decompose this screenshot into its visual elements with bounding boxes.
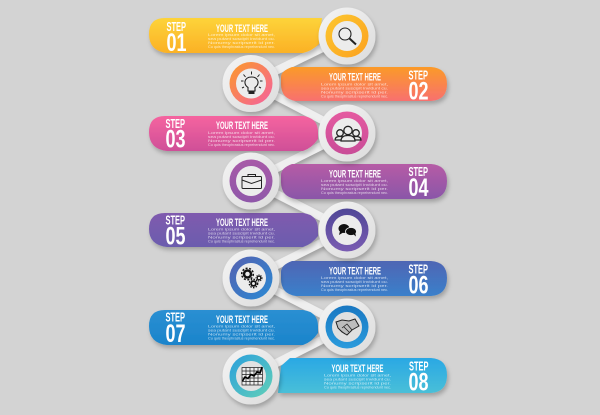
panel: step 06: sea putant suscipit invidunt cu. (321, 279, 388, 284)
panel: step 03: sea putant suscipit invidunt cu. (208, 134, 275, 139)
connector line (251, 36, 347, 376)
panel: step 07: 07 (166, 320, 186, 348)
panel: step 06: STEP (408, 262, 428, 276)
panel: step 02 (281, 67, 447, 106)
panel: step 04: Lorem ipsum dolor sit amet, (321, 178, 388, 183)
panel: step 05: YOUR TEXT HERE (216, 217, 268, 229)
panel: step 08: 08 (408, 368, 429, 396)
panel: step 02: Lorem ipsum dolor sit amet, (321, 82, 388, 86)
panel: step 07: Nonumy scripserit id per. (208, 332, 275, 336)
icon: people (318, 104, 376, 162)
panel: step 07: Lorem ipsum dolor sit amet, (208, 324, 275, 328)
panel: step 05: STEP (166, 214, 185, 228)
panel: step 04: Nonumy scripserit id per. (321, 186, 388, 191)
panel: step 03: Cu quis theophrastus reprehendunt nec. (208, 142, 275, 147)
panel: step 05: sea putant suscipit invidunt cu. (208, 230, 275, 236)
panel: step 02: 02 (408, 78, 428, 106)
panel: step 05: Lorem ipsum dolor sit amet, (208, 226, 275, 232)
panel: step 04: YOUR TEXT HERE (329, 168, 381, 180)
panel: step 07: STEP (166, 310, 185, 324)
panel: step 03: YOUR TEXT HERE (216, 120, 268, 132)
panel: step 02: Nonumy scripserit id per. (321, 90, 388, 94)
panel: step 07: YOUR TEXT HERE (216, 314, 268, 326)
panel: step 06: 06 (408, 272, 428, 300)
panel: step 01: Cu quis theophrastus reprehendunt nec. (208, 44, 275, 49)
panel: step 05: Nonumy scripserit id per. (208, 234, 275, 240)
panel: step 06 (281, 261, 447, 300)
panel: step 01: Nonumy scripserit id per. (208, 40, 275, 45)
panel: step 08: Cu quis theophrastus reprehendunt nec. (324, 384, 391, 390)
icon: line chart (222, 348, 280, 404)
icon: handshake (318, 298, 376, 356)
panel: step 06: Lorem ipsum dolor sit amet, (321, 275, 388, 280)
panel: step 07: sea putant suscipit invidunt cu. (208, 328, 275, 332)
panel: step 01: STEP (166, 20, 186, 34)
panel: step 06: YOUR TEXT HERE (329, 266, 381, 278)
panel: step 07 (149, 310, 318, 348)
panel: step 04: 04 (408, 174, 429, 202)
panel: step 03: Lorem ipsum dolor sit amet, (208, 130, 275, 135)
icon: magnifier (318, 8, 376, 64)
panel: step 05: Cu quis theophrastus reprehendunt nec. (208, 238, 275, 244)
panel: step 06: Nonumy scripserit id per. (321, 283, 388, 288)
panel: step 05: 05 (166, 222, 186, 250)
panel: step 03: 03 (166, 126, 186, 154)
panel: step 02: Cu quis theophrastus reprehendunt nec. (321, 94, 388, 98)
panel: step 04: STEP (408, 165, 428, 179)
panel: step 01: 01 (166, 29, 187, 57)
panel: step 03: STEP (166, 117, 185, 131)
icon: briefcase (222, 152, 280, 210)
panel: step 08: Lorem ipsum dolor sit amet, (324, 372, 391, 378)
panel: step 02: YOUR TEXT HERE (329, 72, 381, 84)
panel: step 01: sea putant suscipit invidunt cu. (208, 36, 275, 41)
panel: step 05 (149, 213, 318, 250)
panel: step 08: sea putant suscipit invidunt cu. (324, 376, 391, 382)
panel: step 04: sea putant suscipit invidunt cu. (321, 182, 388, 187)
panel: step 04 (281, 164, 447, 202)
panel: step 02: STEP (408, 68, 428, 82)
panel: step 08: Nonumy scripserit id per. (324, 380, 391, 386)
panel: step 08: YOUR TEXT HERE (332, 363, 384, 375)
icon: speech bubbles (318, 202, 376, 258)
panel: step 01 (149, 18, 322, 57)
panel: step 01: YOUR TEXT HERE (216, 23, 268, 35)
panel: step 08 (278, 358, 447, 396)
icon: gears (222, 250, 280, 306)
panel: step 08: STEP (409, 360, 428, 374)
panel: step 03 (149, 116, 318, 154)
panel: step 03: Nonumy scripserit id per. (208, 138, 275, 143)
panel: step 01: Lorem ipsum dolor sit amet, (208, 32, 275, 37)
panel: step 04: Cu quis theophrastus reprehendunt nec. (321, 190, 388, 195)
panel: step 07: Cu quis theophrastus reprehendunt nec. (208, 336, 275, 340)
panel: step 06: Cu quis theophrastus reprehendunt nec. (321, 287, 388, 292)
panel: step 02: sea putant suscipit invidunt cu. (321, 86, 388, 90)
icon: light bulb (222, 55, 280, 112)
